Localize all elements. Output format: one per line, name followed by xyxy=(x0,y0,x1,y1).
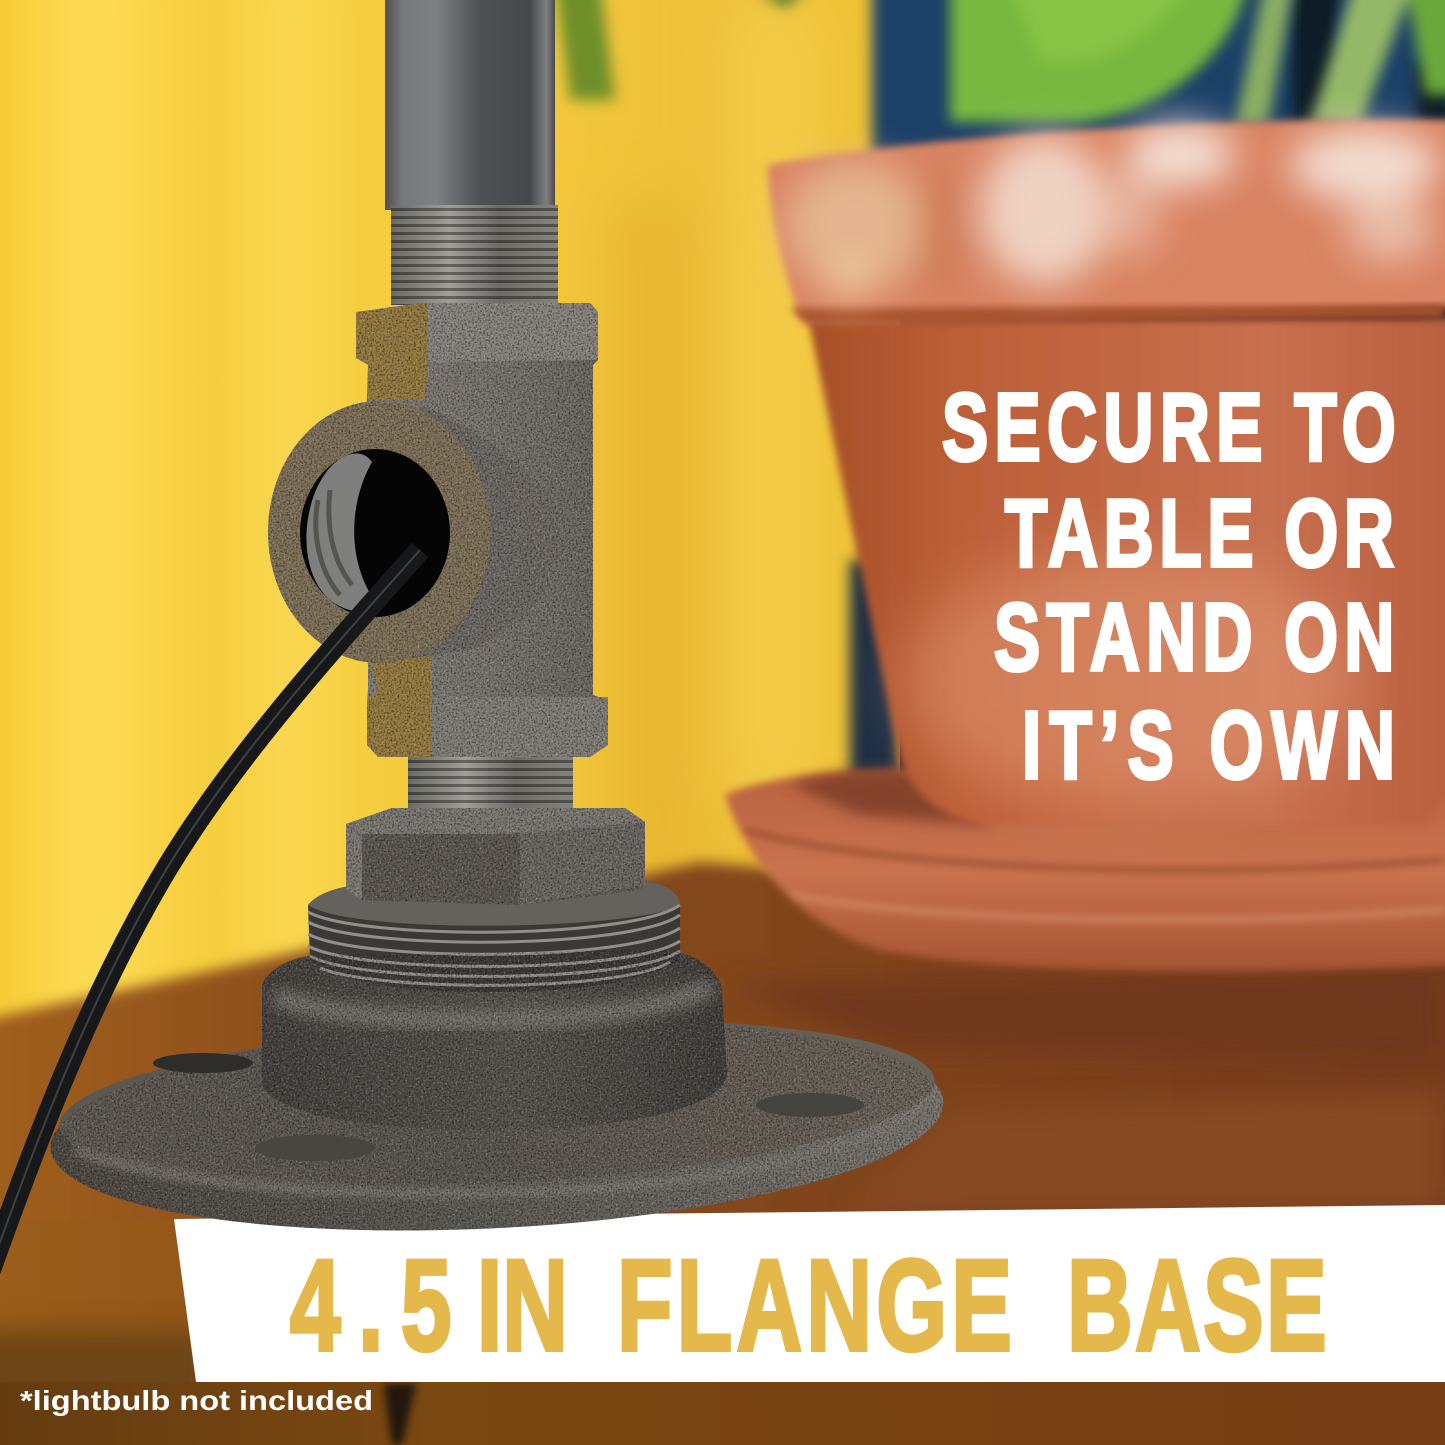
pot body xyxy=(808,318,1445,825)
tee fitting xyxy=(268,303,608,757)
hex bushing xyxy=(346,808,645,905)
lower threaded nipple xyxy=(408,757,573,827)
background: dark blue panel behind pot xyxy=(850,0,1445,790)
table front edge xyxy=(0,1220,1445,1445)
pot saucer xyxy=(725,770,1445,971)
tee left face xyxy=(356,303,428,400)
flange hub xyxy=(262,950,727,1130)
banner title: 4.5 xyxy=(290,1232,469,1378)
flange plate xyxy=(45,999,949,1251)
tee opening xyxy=(300,449,450,617)
terracotta pot xyxy=(725,119,1445,971)
banner title: FLANGE xyxy=(617,1232,1046,1378)
power cord xyxy=(0,550,420,1270)
bushing threads xyxy=(308,880,680,992)
headline: secure to table xyxy=(942,373,1396,799)
banner title: BASE xyxy=(1067,1232,1329,1378)
banner title: IN xyxy=(477,1232,593,1378)
headline: secure to table: STAND ON xyxy=(994,583,1394,691)
flange base xyxy=(45,950,949,1251)
headline: secure to table: SECURE TO xyxy=(942,373,1396,481)
footnote: *lightbulb not included xyxy=(20,1385,373,1416)
plant leaves xyxy=(555,0,1445,125)
banner xyxy=(174,1205,1445,1382)
headline: secure to table: TABLE OR xyxy=(1005,479,1394,587)
iron texture overlay xyxy=(40,300,960,1240)
lamp pipe xyxy=(385,0,558,305)
flange bolt holes xyxy=(153,1053,864,1161)
saucer inner shadow xyxy=(790,769,990,825)
background: yellow wall xyxy=(0,0,900,1150)
threaded pipe section xyxy=(391,205,558,305)
pot rim xyxy=(767,119,1445,322)
tee side branch xyxy=(400,405,565,660)
table top xyxy=(0,862,1445,1445)
headline: secure to table: IT’S OWN xyxy=(1022,691,1395,799)
